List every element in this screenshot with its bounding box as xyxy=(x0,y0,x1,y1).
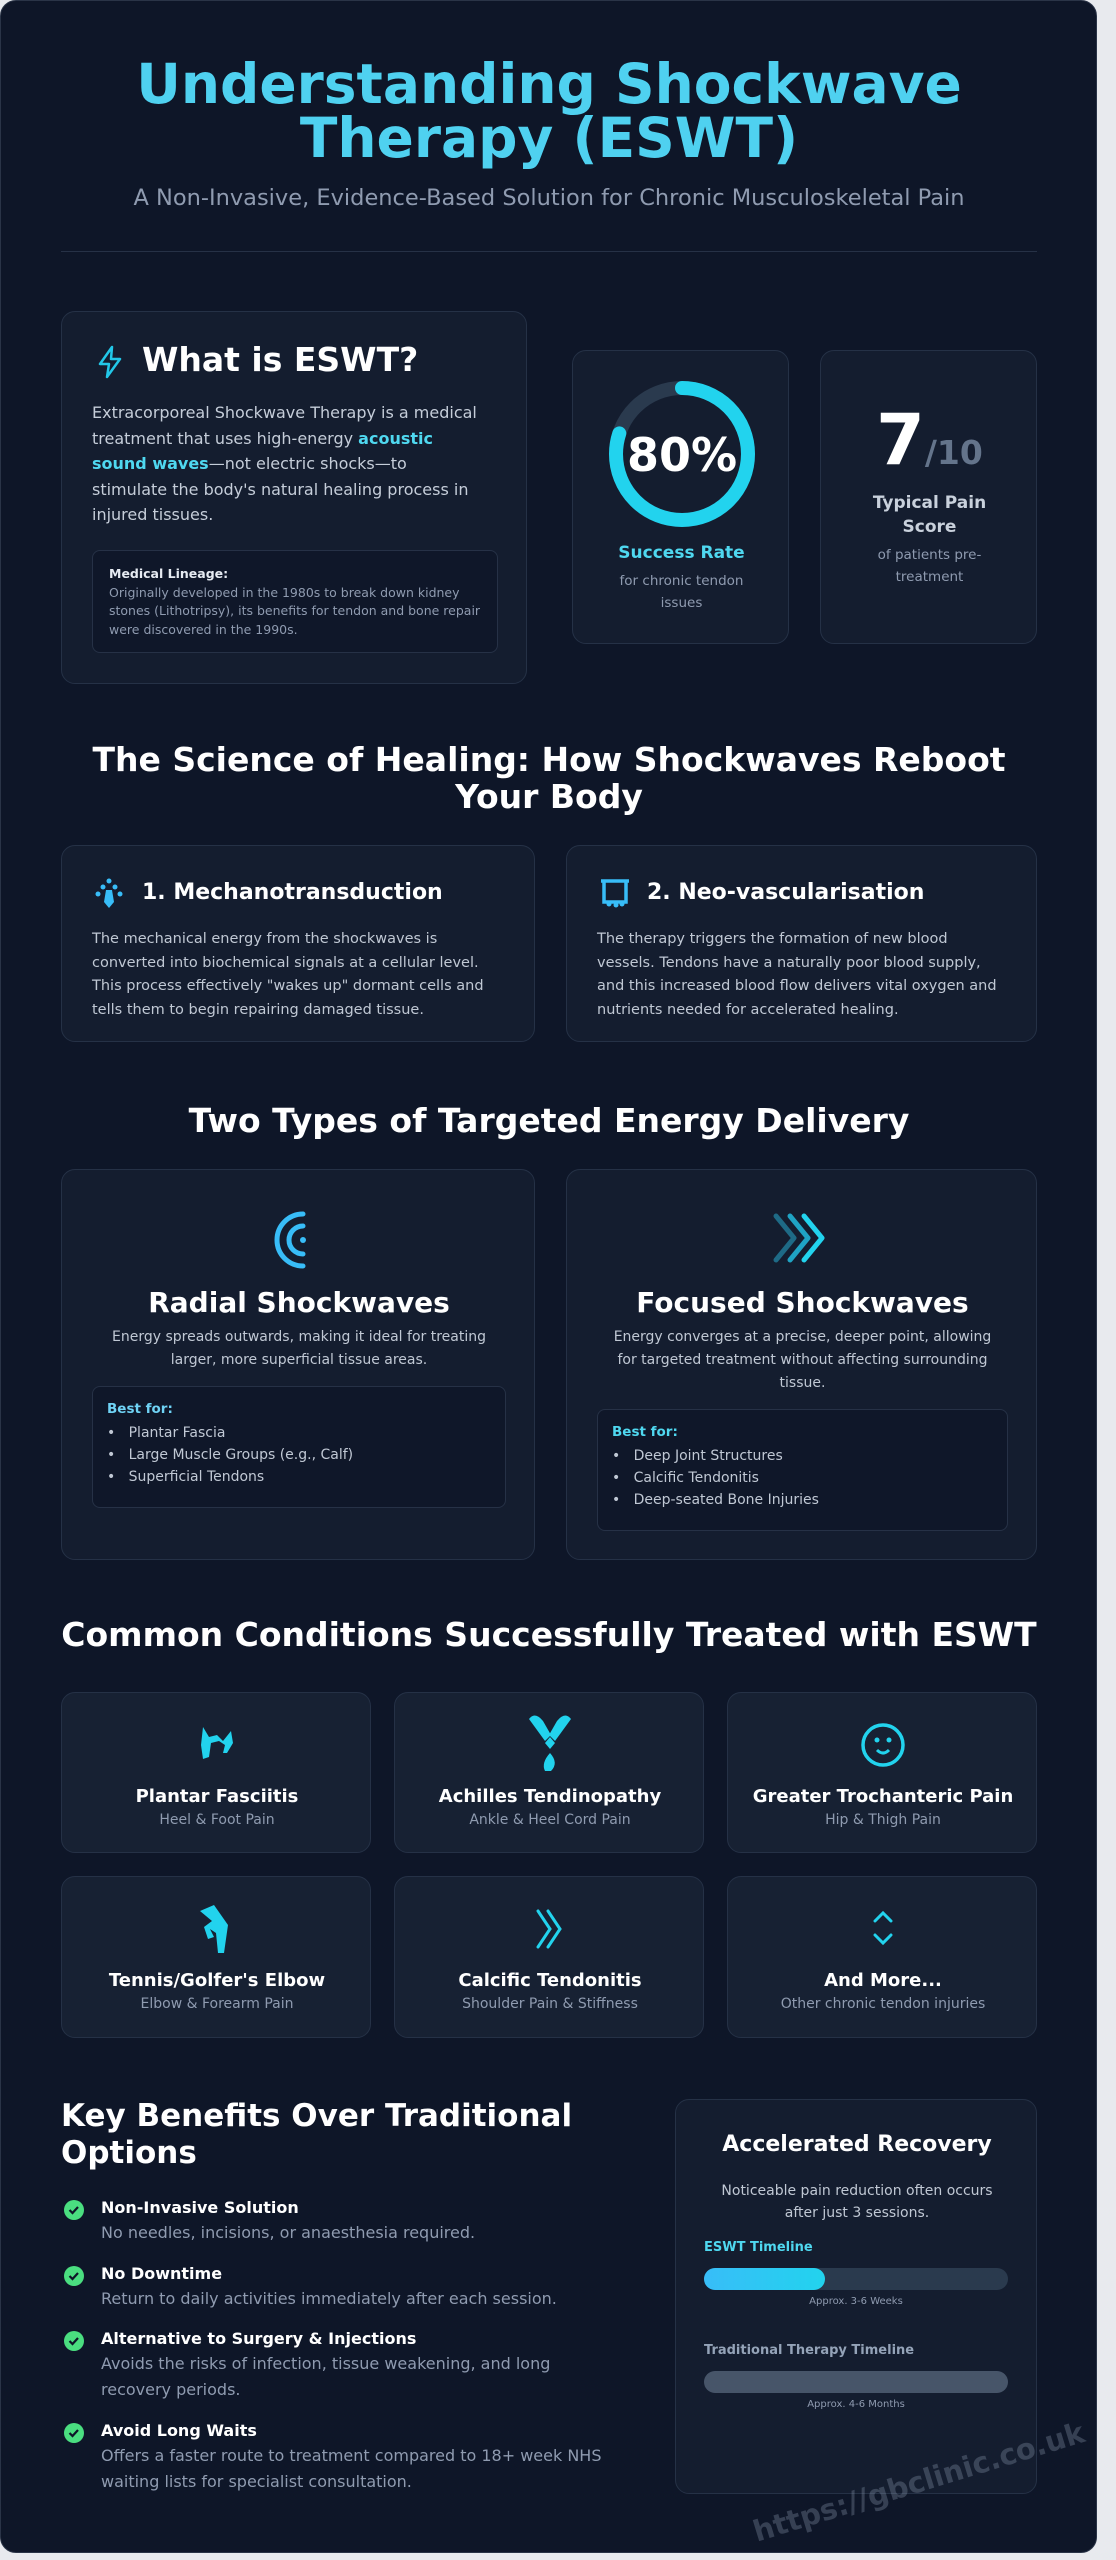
card: and more: Other chronic tendon injuries xyxy=(781,1996,985,2012)
card: plantar fasciitis: Plantar Fasciitis xyxy=(136,1786,298,1807)
benefit 2: Return to daily activities immediately after each session. xyxy=(101,2289,557,2308)
card: achilles xyxy=(394,1692,704,1853)
card: calcific: Shoulder Pain & Stiffness xyxy=(462,1996,638,2012)
chart: ring 80% xyxy=(609,381,755,527)
heading: conditions: Common Conditions Successfully Treated with ESWT xyxy=(61,1615,1037,1654)
chart: traditional timeline bar: Traditional Therapy Timeline xyxy=(704,2343,914,2358)
panel: accelerated recovery xyxy=(675,2099,1037,2494)
panel: success rate stat xyxy=(572,350,789,644)
label: Success Rate xyxy=(618,543,745,563)
heading: two types: Two Types of Targeted Energy Delivery xyxy=(189,1101,909,1140)
text: The therapy triggers the formation of new blood vessels. Tendons have a naturally poor blood supply, and this increased blood flow delivers vital oxygen and nutrients needed for accelerated healing. xyxy=(597,931,997,1018)
card: elbow: Tennis/Golfer's Elbow xyxy=(109,1970,325,1991)
best for box: Best for: xyxy=(612,1424,678,1440)
icon: vessel xyxy=(601,879,629,908)
icon: cells xyxy=(96,878,122,908)
chart: ESWT timeline bar: ESWT Timeline xyxy=(704,2240,813,2255)
chart: ring 80%: 80% xyxy=(627,428,737,482)
watermark: https://gbclinic.co.uk xyxy=(749,2415,1089,2549)
big number: 7/10 xyxy=(876,399,983,481)
chart: ESWT timeline bar xyxy=(704,2240,1008,2307)
heading: science: Your Body xyxy=(455,777,643,816)
panel: radial xyxy=(61,1169,535,1560)
card: achilles: Achilles Tendinopathy xyxy=(439,1786,661,1807)
icon: chevrons xyxy=(774,1214,824,1262)
best for box: • Plantar Fascia xyxy=(107,1425,225,1441)
benefit 3: Alternative to Surgery & Injections xyxy=(101,2329,416,2348)
panel: focused xyxy=(566,1169,1037,1560)
chart: ESWT timeline bar: Approx. 3-6 Weeks xyxy=(809,2296,903,2307)
title: Understanding Shockwave xyxy=(136,52,962,116)
text: The mechanical energy from the shockwaves is converted into biochemical signals at a cellular level. This process effectively "wakes up" dormant cells and tells them to begin repairing damaged tissue. xyxy=(92,931,484,1018)
best for box: • Superficial Tendons xyxy=(107,1469,264,1485)
card: elbow xyxy=(61,1876,371,2038)
chart: traditional timeline bar xyxy=(704,2343,1008,2410)
best for box: • Deep-seated Bone Injuries xyxy=(612,1492,819,1508)
list: benefits xyxy=(64,2198,602,2491)
title: Therapy (ESWT) xyxy=(300,106,798,170)
best for box xyxy=(92,1386,506,1508)
panel: what is ESWT xyxy=(61,311,527,684)
best for box: • Deep Joint Structures xyxy=(612,1448,783,1464)
callout: medical lineage xyxy=(92,550,498,653)
benefit 2 xyxy=(64,2264,557,2308)
card: trochanteric: Hip & Thigh Pain xyxy=(825,1812,941,1828)
description: Energy converges at a precise, deeper point, allowing for targeted treatment without affecting surrounding tissue. xyxy=(614,1329,991,1391)
callout: medical lineage: Medical Lineage: xyxy=(109,566,228,581)
panel: neo-vascularisation xyxy=(566,845,1037,1042)
card: elbow: Elbow & Forearm Pain xyxy=(141,1996,293,2012)
heading: What is ESWT? xyxy=(142,340,418,379)
panel: mechanotransduction xyxy=(61,845,535,1042)
icon: arm xyxy=(200,1905,228,1953)
card: calcific: Calcific Tendonitis xyxy=(458,1970,642,1991)
benefit 1: No needles, incisions, or anaesthesia required. xyxy=(101,2223,475,2242)
chart: traditional timeline bar: Approx. 4-6 Months xyxy=(807,2399,905,2410)
benefit 4: Offers a faster route to treatment compared to 18+ week NHS waiting lists for specialist consultation. xyxy=(101,2446,602,2491)
card: plantar fasciitis: Heel & Foot Pain xyxy=(159,1812,275,1828)
icon: up down xyxy=(873,1911,893,1945)
best for box: Best for: xyxy=(107,1401,173,1417)
description: Energy spreads outwards, making it ideal for treating larger, more superficial tissue areas. xyxy=(112,1329,486,1368)
body text: Extracorporeal Shockwave Therapy is a medical treatment that uses high-energy acoustic sound waves—not electric shocks—to stimulate the body's natural healing process in injured tissues. xyxy=(92,403,477,524)
card: achilles: Ankle & Heel Cord Pain xyxy=(469,1812,631,1828)
card: trochanteric xyxy=(727,1692,1037,1853)
card: plantar fasciitis xyxy=(61,1692,371,1853)
panel: pain score stat xyxy=(820,350,1037,644)
heading: science xyxy=(92,740,1006,816)
heading: 1. Mechanotransduction xyxy=(142,880,443,905)
card: and more: And More... xyxy=(824,1970,942,1991)
benefit 4: Avoid Long Waits xyxy=(101,2421,257,2440)
panel: pain score stat: of patients pre-treatment xyxy=(878,547,981,585)
icon: foot xyxy=(201,1727,233,1759)
subtitle: A Non-Invasive, Evidence-Based Solution for Chronic Musculoskeletal Pain xyxy=(133,185,965,211)
heading: 2. Neo-vascularisation xyxy=(647,880,924,905)
panel: accelerated recovery: Noticeable pain reduction often occurs after just 3 sessions. xyxy=(721,2183,993,2221)
benefit 2: No Downtime xyxy=(101,2264,222,2283)
best for box: • Calcific Tendonitis xyxy=(612,1470,759,1486)
heading: key benefits: Key Benefits Over Traditional Options xyxy=(61,2098,572,2171)
panel: accelerated recovery: Accelerated Recovery xyxy=(722,2132,992,2157)
card: and more xyxy=(727,1876,1037,2038)
best for box: • Large Muscle Groups (e.g., Calf) xyxy=(107,1447,353,1463)
benefit 1 xyxy=(64,2198,475,2242)
best for box xyxy=(597,1409,1008,1531)
icon: radial waves xyxy=(274,1212,306,1268)
icon: smiley xyxy=(861,1723,905,1767)
heading: science: The Science of Healing: How Shockwaves Reboot xyxy=(92,740,1006,779)
icon: lightning xyxy=(98,346,122,378)
icon: double chevron xyxy=(536,1909,562,1949)
panel: pain score stat: Typical Pain Score xyxy=(873,493,986,537)
card: calcific xyxy=(394,1876,704,2038)
benefit 3: Avoids the risks of infection, tissue weakening, and long recovery periods. xyxy=(101,2354,550,2399)
panel: success rate stat: for chronic tendon issues xyxy=(620,573,743,611)
title: Focused Shockwaves xyxy=(636,1286,969,1319)
callout: medical lineage: Originally developed in the 1980s to break down kidney stones (Lithotripsy), its benefits for tendon and bone repair were discovered in the 1990s. xyxy=(109,584,480,636)
title: Radial Shockwaves xyxy=(148,1286,450,1319)
benefit 1: Non-Invasive Solution xyxy=(101,2198,299,2217)
title xyxy=(136,52,962,170)
icon: tendon xyxy=(529,1716,571,1771)
card: trochanteric: Greater Trochanteric Pain xyxy=(753,1786,1013,1807)
benefit 3 xyxy=(64,2329,550,2399)
benefit 4 xyxy=(64,2421,602,2491)
